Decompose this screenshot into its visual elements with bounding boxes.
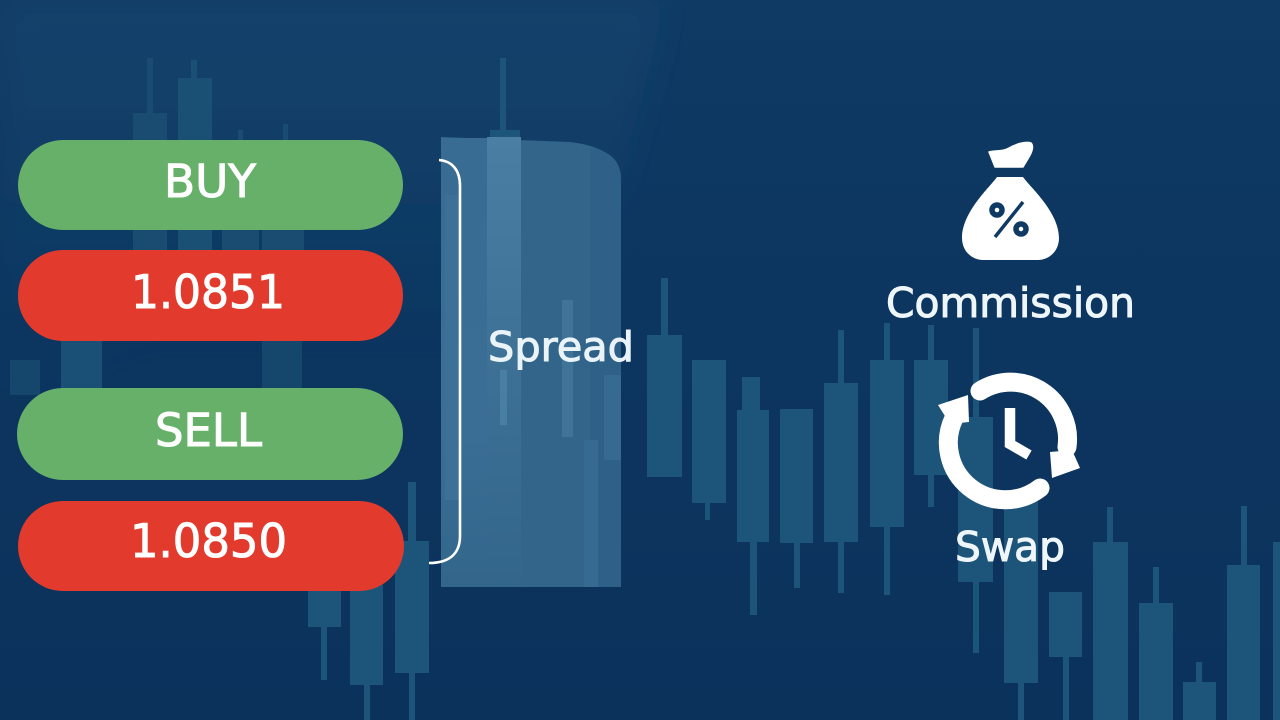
button: buy price: [18, 250, 403, 341]
button: sell price: 1.0850: [130, 514, 287, 568]
background glow: [0, 0, 665, 420]
spread bracket: [429, 160, 460, 563]
button: BUY: [18, 140, 403, 230]
label: Spread: Spread: [488, 323, 634, 371]
button: BUY: BUY: [164, 155, 257, 208]
candle above spread band: [490, 58, 520, 140]
button: SELL: SELL: [155, 404, 262, 457]
spread band: [441, 137, 621, 587]
button: buy price: 1.0851: [131, 265, 285, 319]
candles behind the buttons: [10, 58, 429, 720]
icon: swap clock with circular arrows: [938, 382, 1080, 500]
candles on the right: [647, 278, 1280, 720]
button: SELL: [17, 388, 403, 480]
label: Swap: Swap: [955, 523, 1065, 571]
label: Commission: Commission: [886, 279, 1135, 327]
icon: money bag with percent: [962, 142, 1059, 260]
button: sell price: [18, 501, 404, 591]
